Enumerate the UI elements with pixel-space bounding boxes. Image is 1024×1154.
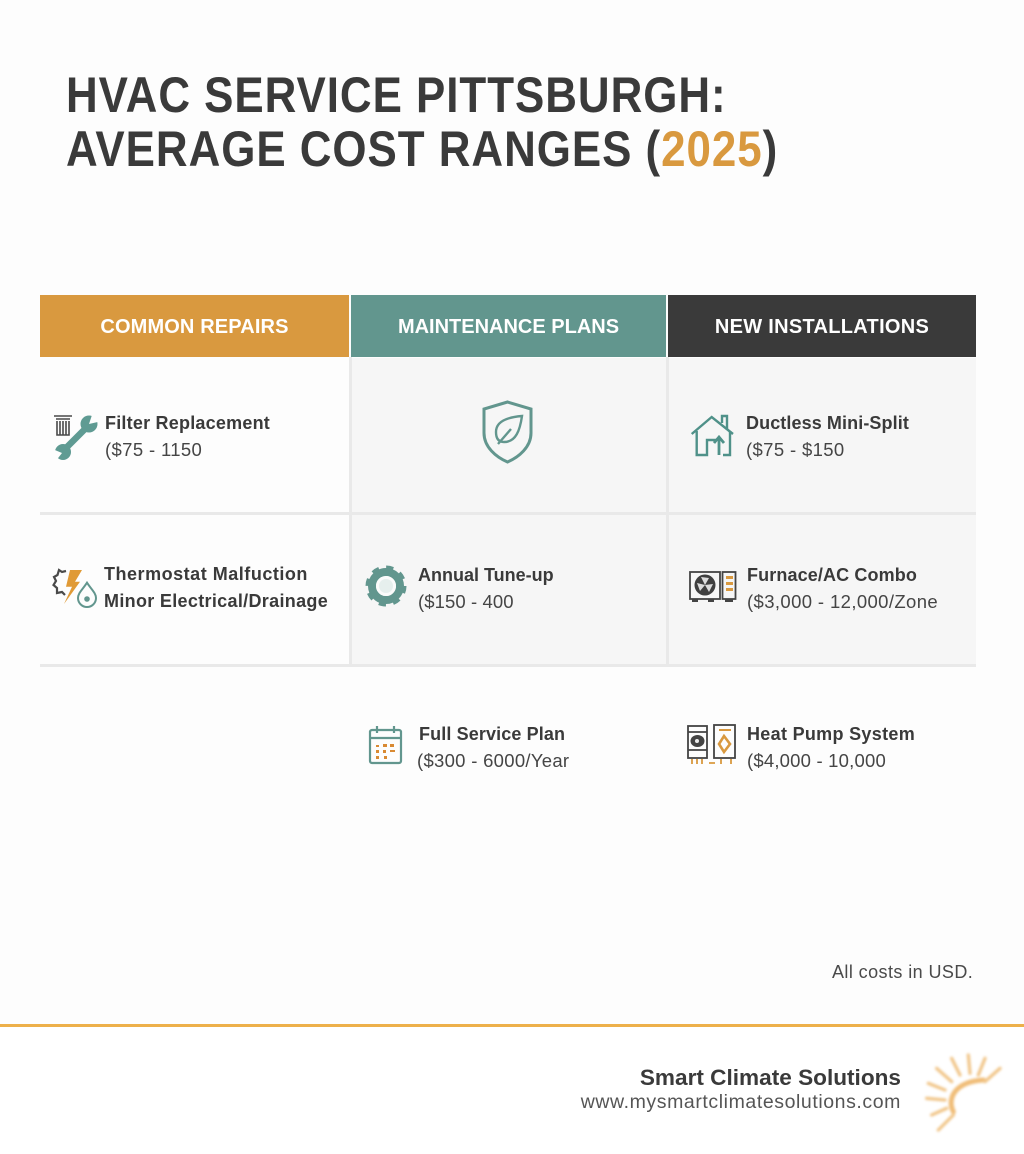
panel: table cell backgrounds [350, 358, 976, 665]
icon: gear [366, 566, 406, 606]
icon: sun logo [924, 1052, 1003, 1133]
header: common repairs: COMMON REPAIRS [100, 316, 289, 338]
text: ductless mini-split: ($75 - $150 [746, 439, 845, 460]
title: AVERAGE COST RANGES (2025) [66, 121, 778, 177]
footer brand [580, 1065, 901, 1113]
footer brand: Smart Climate Solutions [640, 1065, 901, 1090]
text: thermostat and electrical [104, 564, 328, 611]
header: new installations [668, 295, 976, 357]
icon: house [691, 414, 734, 456]
header: maintenance plans [351, 295, 666, 357]
text: annual tune-up: ($150 - 400 [418, 591, 514, 612]
title: HVAC SERVICE PITTSBURGH: [66, 67, 727, 123]
title [66, 67, 778, 177]
text: filter replacement: ($75 - 1150 [105, 439, 202, 460]
note: currency: All costs in USD. [832, 962, 973, 982]
icon: outdoor AC unit [689, 571, 736, 602]
footer divider [0, 1024, 1024, 1027]
text: full service plan [417, 724, 569, 771]
text: heat pump system: Heat Pump System [747, 724, 915, 744]
icon: filter and wrench [54, 415, 98, 460]
text: furnace and AC combo: Furnace/AC Combo [747, 565, 917, 585]
text: full service plan: Full Service Plan [419, 724, 565, 744]
header: new installations: NEW INSTALLATIONS [715, 316, 929, 338]
text: annual tune-up [418, 565, 554, 612]
header: maintenance plans: MAINTENANCE PLANS [398, 316, 619, 338]
text: thermostat and electrical: Thermostat Malfuction [104, 564, 308, 584]
text: heat pump system [747, 724, 915, 771]
icon: maintenance shield [482, 400, 532, 464]
header: common repairs [40, 295, 349, 357]
text: filter replacement: Filter Replacement [105, 413, 270, 433]
text: ductless mini-split [746, 413, 909, 460]
icon: gear, lightning and water drop [52, 568, 97, 608]
text: furnace and AC combo [747, 565, 938, 612]
text: furnace and AC combo: ($3,000 - 12,000/Zone [747, 591, 938, 612]
text: annual tune-up: Annual Tune-up [418, 565, 554, 585]
text: thermostat and electrical: Minor Electrical/Drainage [104, 591, 328, 611]
text: ductless mini-split: Ductless Mini-Split [746, 413, 909, 433]
footer brand: www.mysmartclimatesolutions.com [581, 1091, 901, 1113]
text: heat pump system: ($4,000 - 10,000 [747, 750, 886, 771]
text: full service plan: ($300 - 6000/Year [417, 750, 569, 771]
icon: heat pump system [687, 724, 736, 764]
icon: calendar [368, 726, 402, 764]
text: filter replacement [105, 413, 270, 460]
